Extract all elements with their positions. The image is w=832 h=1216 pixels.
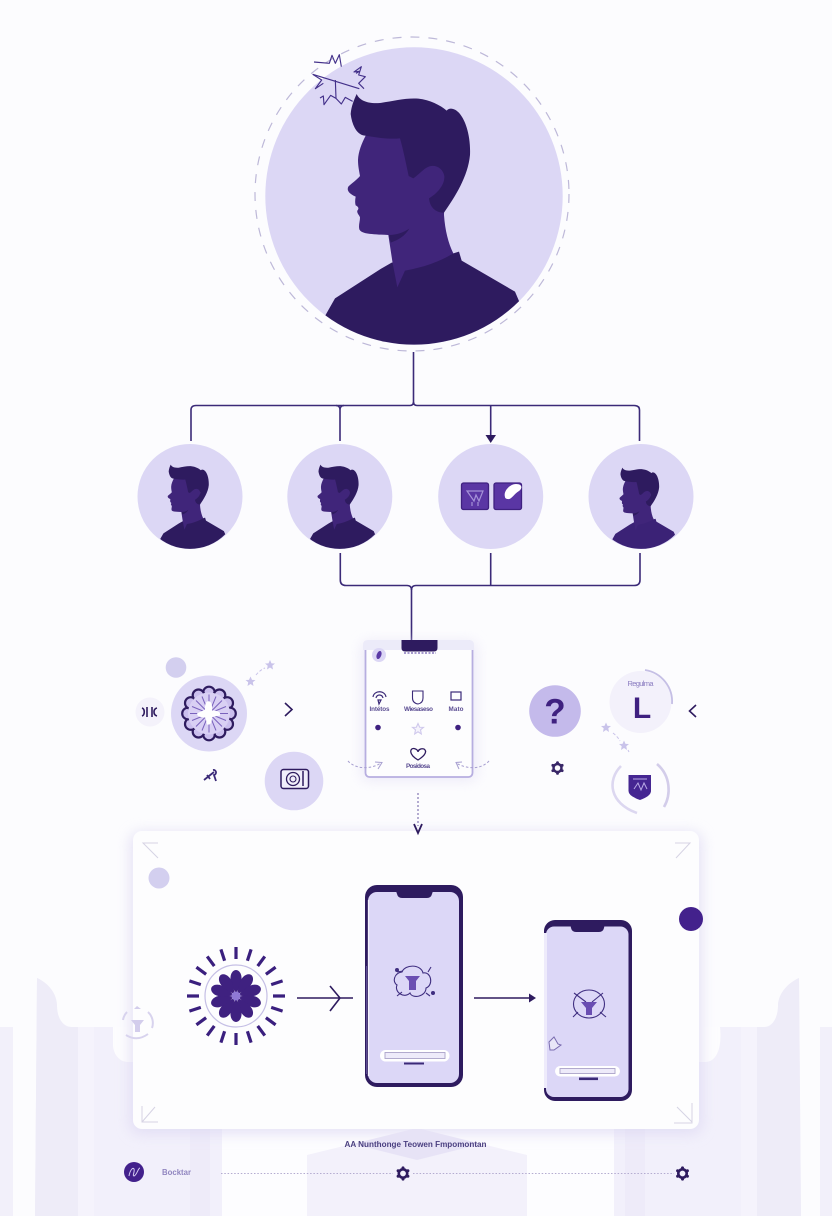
center app card [348, 640, 489, 780]
question badge [529, 685, 581, 737]
tile with white swoosh [494, 483, 522, 510]
small bell icon [549, 1037, 561, 1050]
pill button [555, 1066, 620, 1076]
footer label: Bocktar [162, 1168, 191, 1177]
circle 3 with two app tiles [438, 444, 543, 549]
sparkle burst icon [313, 55, 365, 105]
dashed link with stars [246, 660, 275, 686]
question badge: ? [544, 692, 566, 732]
cloud icon [394, 966, 435, 996]
letter badge: Regulma [628, 679, 654, 688]
home bar [404, 1062, 424, 1064]
card top band [363, 640, 474, 650]
label 2: Wiesaseso [404, 706, 433, 713]
mandala badge [171, 676, 247, 752]
lower connector tree [340, 553, 640, 640]
picture icon [451, 692, 461, 700]
shield emblem with arcs [613, 764, 669, 813]
tiny pin icon [204, 770, 216, 781]
left satellite icons [136, 657, 323, 810]
wifi eye icon [373, 692, 386, 704]
lavender dot [148, 868, 170, 888]
decorative lower background bands [0, 978, 832, 1216]
curved arrows into card [348, 761, 489, 769]
right satellite icons [529, 670, 696, 813]
profile circle 4 [588, 444, 694, 552]
profile circle 2 [287, 444, 392, 552]
dashed ring [255, 37, 569, 351]
letter badge: L [633, 692, 651, 725]
chevron left [690, 705, 696, 717]
timeline gear 1 [397, 1166, 409, 1181]
main silhouette [320, 94, 520, 353]
tile with W glyph [462, 483, 488, 510]
profile circle 1 [138, 444, 242, 552]
phone 1 [365, 885, 463, 1087]
footer logo badge [124, 1162, 144, 1182]
avatar dot [372, 648, 386, 662]
corner marks [142, 843, 692, 1123]
arrow between phones [474, 994, 536, 1002]
shield icon [412, 691, 423, 704]
caption diamond backdrop [353, 1128, 481, 1160]
dotted arrow to lower panel [414, 793, 422, 833]
small lavender dot [166, 657, 186, 678]
dotted timeline [221, 1172, 674, 1174]
purple dot [679, 907, 703, 931]
letter badge [610, 670, 672, 733]
main profile: circle and silhouette [255, 37, 569, 353]
pale badge with mirrored marks [136, 698, 164, 726]
label 3: Mato [448, 706, 464, 713]
small gear [551, 761, 564, 775]
card body [366, 641, 472, 777]
footer caption: AA Nunthonge Teowen Fmpomontan [344, 1139, 486, 1149]
camera badge [265, 752, 323, 810]
label 1: Intétos [370, 706, 390, 713]
faded side icon [123, 1006, 153, 1038]
top connector tree [191, 352, 640, 441]
star outline [412, 724, 424, 734]
chevron right [285, 703, 292, 716]
pill button [380, 1050, 450, 1062]
stars with dashed link [601, 722, 629, 752]
clip [402, 640, 438, 652]
lower panel [123, 831, 703, 1129]
phone 2 [544, 920, 632, 1101]
sunburst flower [187, 947, 285, 1045]
arrowhead into third circle [486, 435, 496, 443]
card dots [375, 725, 461, 730]
funnel emblem [573, 990, 606, 1018]
timeline gear 2 [676, 1166, 689, 1181]
heart icon [411, 748, 426, 760]
home bar [579, 1078, 598, 1080]
card shadow [362, 642, 476, 780]
lower panel shadow [130, 832, 702, 1134]
arrow flower to phone [297, 986, 353, 1011]
main circle [265, 47, 563, 345]
label 4: Posidosa [406, 763, 430, 770]
